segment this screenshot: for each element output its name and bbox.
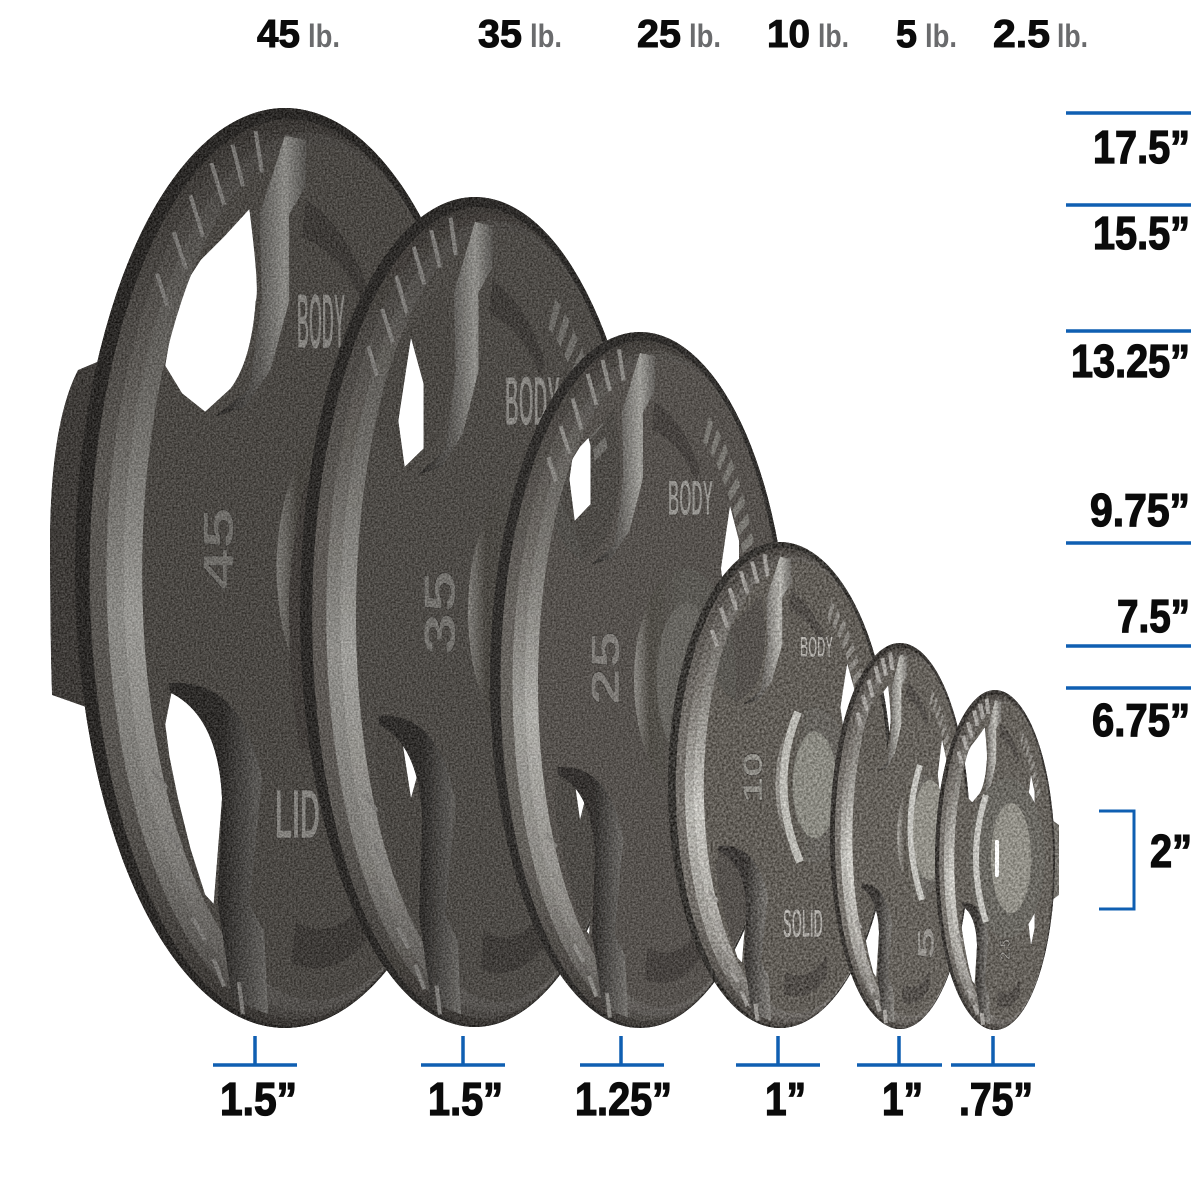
label: 5 lb: 5 — [896, 13, 917, 56]
thickness: 35 lb plate — [421, 1036, 505, 1125]
plate: 2.5 lb — [935, 690, 1059, 1030]
label: 2.5 lb: 2.5 — [993, 13, 1050, 56]
thickness: 2.5 lb plate — [951, 1036, 1035, 1125]
plate: 35 lb: 35 — [416, 570, 465, 655]
plate: 45 lb — [50, 108, 495, 1028]
thickness: 35 lb plate: 1.5” — [428, 1073, 503, 1125]
label: 45 lb — [257, 13, 340, 56]
label: 10 lb — [767, 13, 849, 56]
plate: 25 lb — [490, 332, 790, 1028]
plate: 10 lb: SOLID — [783, 902, 823, 946]
label: 45 lb: lb. — [308, 18, 340, 54]
plate: 10 lb — [668, 542, 892, 1028]
label: 2.5 lb: lb. — [1057, 18, 1088, 54]
plate: 35 lb — [289, 197, 650, 1027]
plate: 35 lb: BODY — [505, 362, 560, 440]
thickness: 2.5 lb plate: .75” — [959, 1073, 1033, 1125]
thickness scale — [213, 1036, 1035, 1125]
plate: 45 lb: 45 — [194, 508, 242, 590]
label: 25 lb — [637, 13, 721, 56]
label: 25 lb: 25 — [637, 13, 681, 56]
thickness: 10 lb plate — [736, 1036, 820, 1125]
label: 2.5 lb — [993, 13, 1088, 56]
weight labels — [257, 13, 1088, 56]
label: 35 lb: lb. — [530, 18, 562, 54]
thickness: 10 lb plate: 1” — [765, 1073, 806, 1125]
diameter scale — [1066, 113, 1192, 909]
label: 5 lb — [896, 13, 957, 56]
label: 35 lb: 35 — [478, 13, 522, 56]
weight plates illustration — [50, 108, 1059, 1030]
label: 45 lb: 45 — [257, 13, 300, 56]
diameter: 9.75 inches: 9.75” — [1090, 484, 1190, 536]
plate: 45 lb: BODY — [297, 277, 345, 365]
diameter: 7.5 inches — [1066, 590, 1191, 646]
bore bracket: 2 inches: 2” — [1150, 825, 1192, 877]
label: 10 lb: lb. — [818, 18, 849, 54]
label: 35 lb — [478, 13, 562, 56]
thickness: 5 lb plate — [857, 1036, 942, 1125]
thickness: 45 lb plate: 1.5” — [220, 1073, 297, 1125]
diameter: 9.75 inches — [1066, 484, 1191, 543]
plate: 45 lb: LID — [275, 775, 320, 853]
thickness: 25 lb plate: 1.25” — [575, 1073, 672, 1125]
thickness: 5 lb plate: 1” — [882, 1073, 923, 1125]
plate: 25 lb: BODY — [668, 470, 713, 526]
thickness: 25 lb plate — [575, 1036, 672, 1125]
bore bracket: 2 inches — [1099, 811, 1192, 909]
plate: 10 lb: 10 — [738, 752, 768, 803]
plate: 10 lb: BODY — [800, 631, 833, 664]
thickness: 45 lb plate — [213, 1036, 297, 1125]
diameter: 6.75 inches — [1066, 688, 1191, 746]
label: 25 lb: lb. — [689, 18, 721, 54]
label: 5 lb: lb. — [925, 18, 957, 54]
label: 10 lb: 10 — [767, 13, 810, 56]
diameter: 17.5 inches — [1066, 113, 1191, 173]
plate: 5 lb: 5 — [913, 927, 939, 960]
plate: 25 lb: 25 — [583, 632, 628, 705]
plate: 2.5 lb: 2.5 — [997, 939, 1014, 960]
plate: 5 lb — [830, 643, 970, 1029]
